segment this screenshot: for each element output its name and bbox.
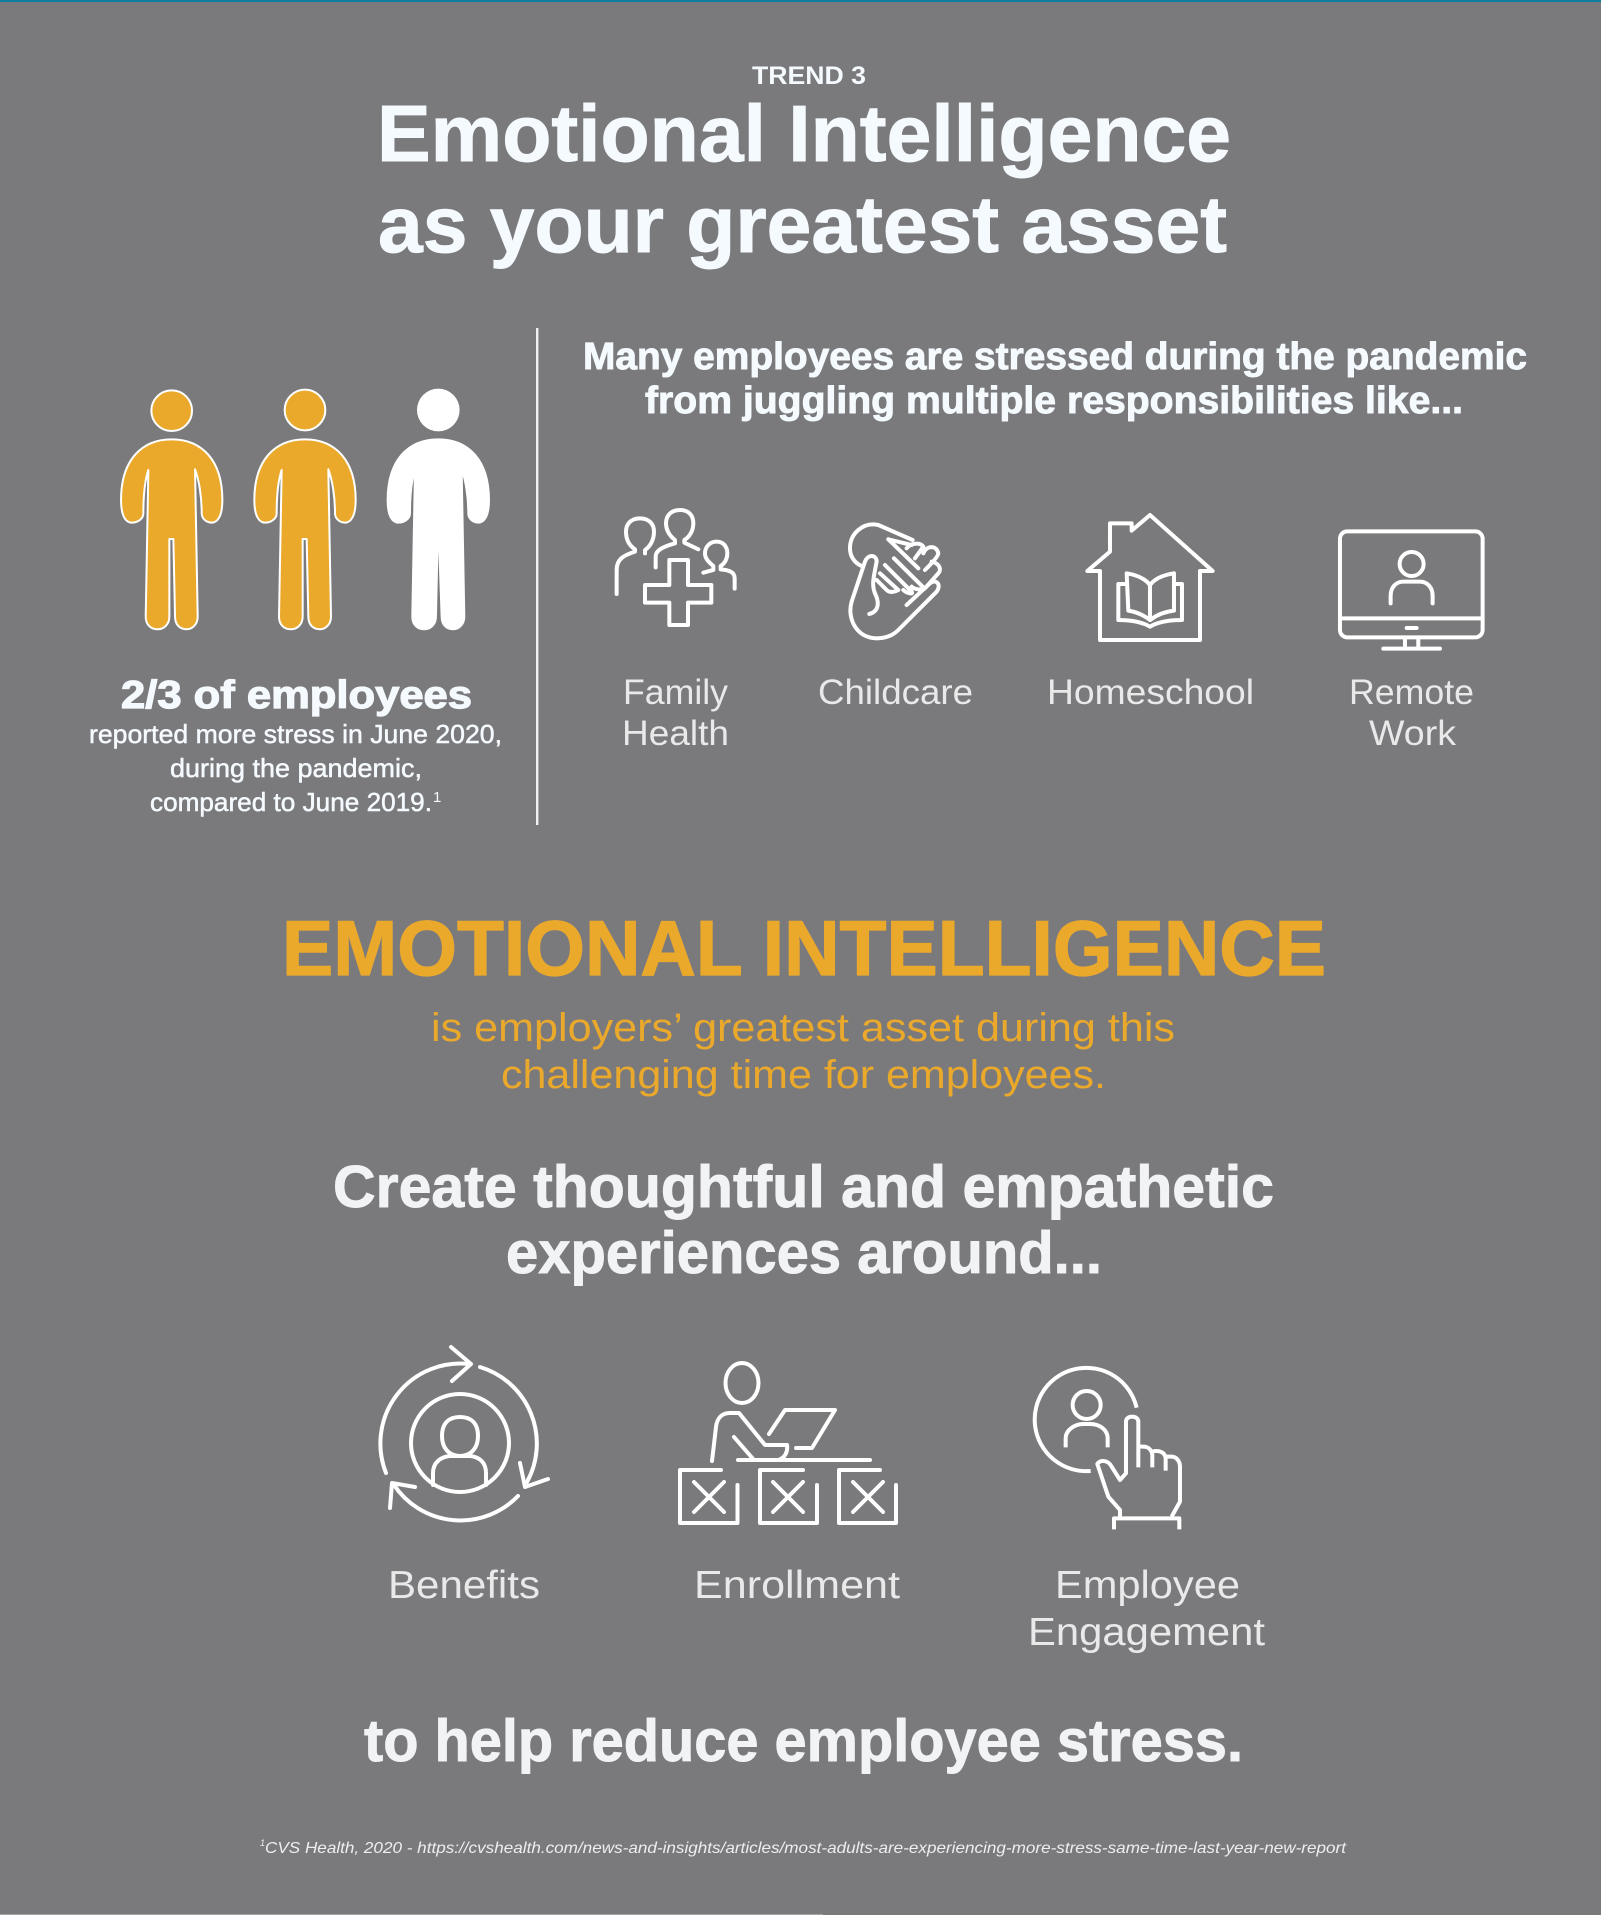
label: Family Health: Family (623, 673, 728, 712)
label: Homeschool: Homeschool (1047, 673, 1254, 712)
label: Remote Work (1349, 673, 1474, 753)
stat description: during the pandemic, (170, 753, 422, 783)
panel: two thirds of employees stressed (89, 389, 502, 817)
label: Remote Work: Remote (1349, 673, 1474, 712)
subheading: greatest asset: is employers’ greatest asset during this (431, 1006, 1175, 1050)
icon: homeschool house with book (1087, 515, 1213, 640)
label: Enrollment: Enrollment (694, 1564, 900, 1607)
label: Employee Engagement (1028, 1564, 1265, 1654)
stat: 2/3 of employees: 2/3 of employees (121, 674, 472, 717)
title: as your greatest asset (378, 180, 1227, 269)
panel: juggling multiple responsibilities (583, 336, 1527, 753)
icon: childcare hands (850, 524, 940, 638)
icon: benefits cycle (380, 1347, 548, 1520)
icon: employee engagement hand pointing (1035, 1368, 1180, 1529)
label: Remote Work: Work (1369, 714, 1457, 753)
label: Benefits: Benefits (388, 1564, 540, 1607)
footnote: CVS Health, 2020 - https://cvshealth.com/news-and-insights/articles/most-adults-are-experiencing-more-stress-same-time-last-year-new-report (265, 1840, 1347, 1857)
label: Family Health (622, 673, 729, 753)
stat description: reported more stress in June 2020, (89, 719, 502, 749)
heading: many employees stressed (583, 336, 1527, 422)
heading: many employees stressed: Many employees are stressed during the pandemic (583, 336, 1527, 378)
label: Employee Engagement: Employee (1055, 1564, 1240, 1607)
heading: EMOTIONAL INTELLIGENCE: EMOTIONAL INTELLIGENCE (282, 904, 1326, 992)
eyebrow: TREND 3: TREND 3 (752, 62, 866, 90)
heading: many employees stressed: from juggling multiple responsibilities like... (645, 380, 1463, 422)
stat description (89, 719, 502, 817)
stat description: compared to June 2019. (150, 787, 432, 817)
label: Family Health: Health (622, 714, 729, 753)
heading: create thoughtful experiences (333, 1154, 1274, 1286)
label: Childcare: Childcare (818, 673, 973, 712)
panel: experience areas (380, 1347, 1265, 1654)
icon: enrollment person at laptop with checkboxes (680, 1363, 896, 1523)
pictogram: three people, two highlighted (121, 389, 489, 629)
icon: family health (617, 510, 735, 625)
footnote: 1 (260, 1838, 265, 1848)
heading: create thoughtful experiences: Create thoughtful and empathetic (333, 1154, 1274, 1220)
title (377, 89, 1231, 269)
title: Emotional Intelligence (377, 89, 1231, 178)
label: Employee Engagement: Engagement (1028, 1611, 1265, 1654)
icon: remote work monitor (1340, 531, 1483, 649)
stat description: 1 (433, 789, 441, 806)
closing statement: to help reduce employee stress. (364, 1708, 1243, 1774)
heading: create thoughtful experiences: experiences around... (506, 1220, 1102, 1286)
subheading: greatest asset: challenging time for employees. (501, 1053, 1106, 1097)
subheading: greatest asset (431, 1006, 1175, 1097)
